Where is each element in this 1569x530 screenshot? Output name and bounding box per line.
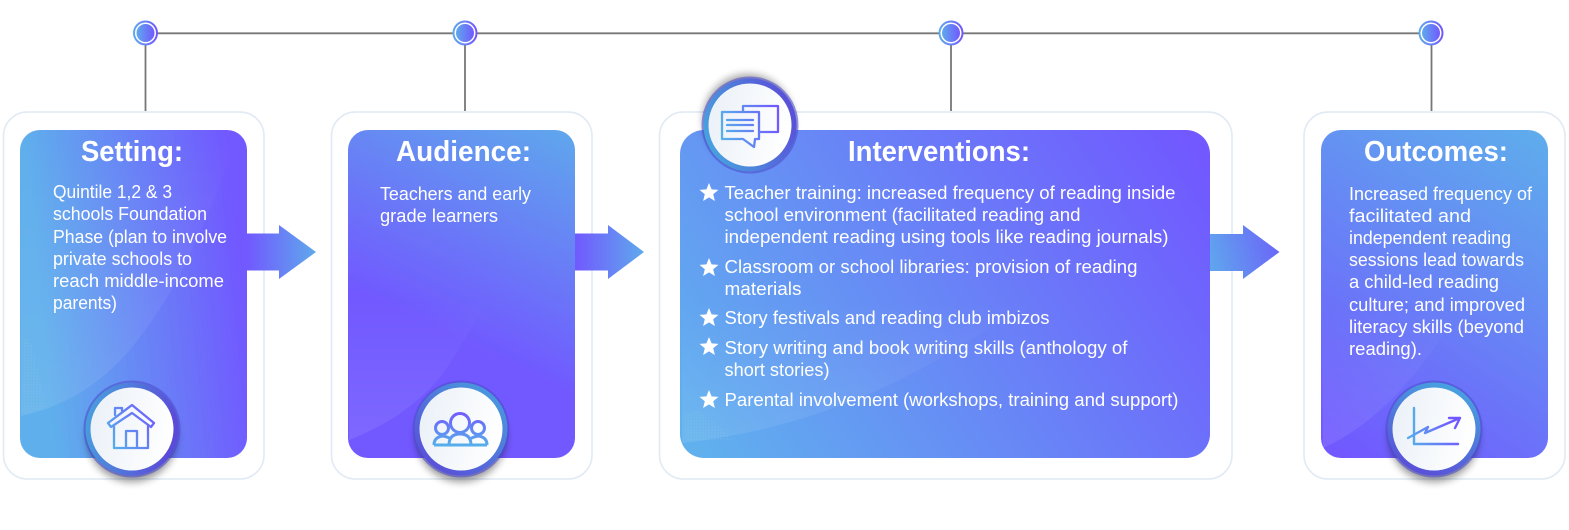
arrow: audience to interventions — [575, 225, 644, 279]
text: setting description: schools Foundation — [53, 204, 207, 224]
list item: libraries — [724, 257, 1138, 299]
star bullet 3 — [700, 308, 718, 326]
text: outcomes description: facilitated and — [1349, 206, 1471, 226]
list item: teacher training — [724, 183, 1176, 247]
list item: teacher training: Teacher training: increased frequency of reading inside — [724, 183, 1176, 203]
text: audience description — [380, 184, 531, 226]
icon: people — [412, 380, 510, 482]
text: outcomes description: culture; and improved — [1349, 295, 1525, 315]
text: outcomes description: reading). — [1349, 339, 1422, 359]
list item: story writing: Story writing and book writing skills (anthology of — [724, 338, 1129, 358]
icon: speech bubbles — [702, 74, 798, 174]
icon: rising chart — [1386, 380, 1482, 482]
star bullet 4 — [700, 337, 718, 355]
panel: setting — [4, 112, 264, 482]
list item: story writing — [724, 338, 1129, 380]
text: outcomes description: a child-led reading — [1349, 272, 1499, 292]
timeline node: setting — [134, 22, 157, 44]
heading: setting: Setting: — [81, 136, 183, 168]
text: setting description: reach middle-income — [53, 271, 224, 291]
star bullet 1 — [700, 183, 718, 201]
text: setting description: Phase (plan to involve — [53, 227, 227, 247]
star bullet 2 — [700, 258, 718, 276]
panel: audience — [332, 112, 592, 482]
icon: house — [84, 380, 180, 482]
timeline connector — [134, 22, 1442, 111]
star bullet 5 — [700, 390, 718, 408]
text: outcomes description — [1349, 184, 1533, 359]
timeline node: outcomes — [1420, 22, 1442, 44]
timeline node: audience — [454, 22, 476, 44]
heading: interventions: Interventions: — [848, 136, 1030, 168]
text: setting description: private schools to — [53, 249, 192, 269]
list item: libraries: Classroom or school libraries: provision of reading — [724, 257, 1138, 277]
list item: story writing: short stories) — [724, 360, 830, 380]
list item: teacher training: independent reading using tools like reading journals) — [724, 227, 1168, 247]
heading: outcomes: Outcomes: — [1364, 136, 1508, 168]
text: outcomes description: literacy skills (beyond — [1349, 317, 1524, 337]
text: audience description: Teachers and early — [380, 184, 531, 204]
list item: libraries: materials — [724, 279, 802, 299]
arrow: setting to audience — [247, 225, 316, 279]
text: setting description — [53, 182, 227, 313]
arrow: interventions to outcomes — [1210, 225, 1280, 279]
text: outcomes description: sessions lead towards — [1349, 250, 1524, 270]
list: interventions — [700, 183, 1178, 410]
text: setting description: parents) — [53, 293, 117, 313]
list item: teacher training: school environment (facilitated reading and — [724, 205, 1080, 225]
heading: audience: Audience: — [396, 136, 531, 168]
text: audience description: grade learners — [380, 206, 498, 226]
list item: festivals: Story festivals and reading club imbizos — [724, 308, 1050, 328]
timeline node: interventions — [940, 22, 962, 44]
list item: parental involvement: Parental involvement (workshops, training and support) — [724, 390, 1178, 410]
panel: outcomes — [1304, 112, 1565, 482]
text: setting description: Quintile 1,2 & 3 — [53, 182, 172, 202]
panel: interventions — [660, 74, 1232, 479]
text: outcomes description: independent reading — [1349, 228, 1511, 248]
text: outcomes description: Increased frequency of — [1349, 184, 1533, 204]
